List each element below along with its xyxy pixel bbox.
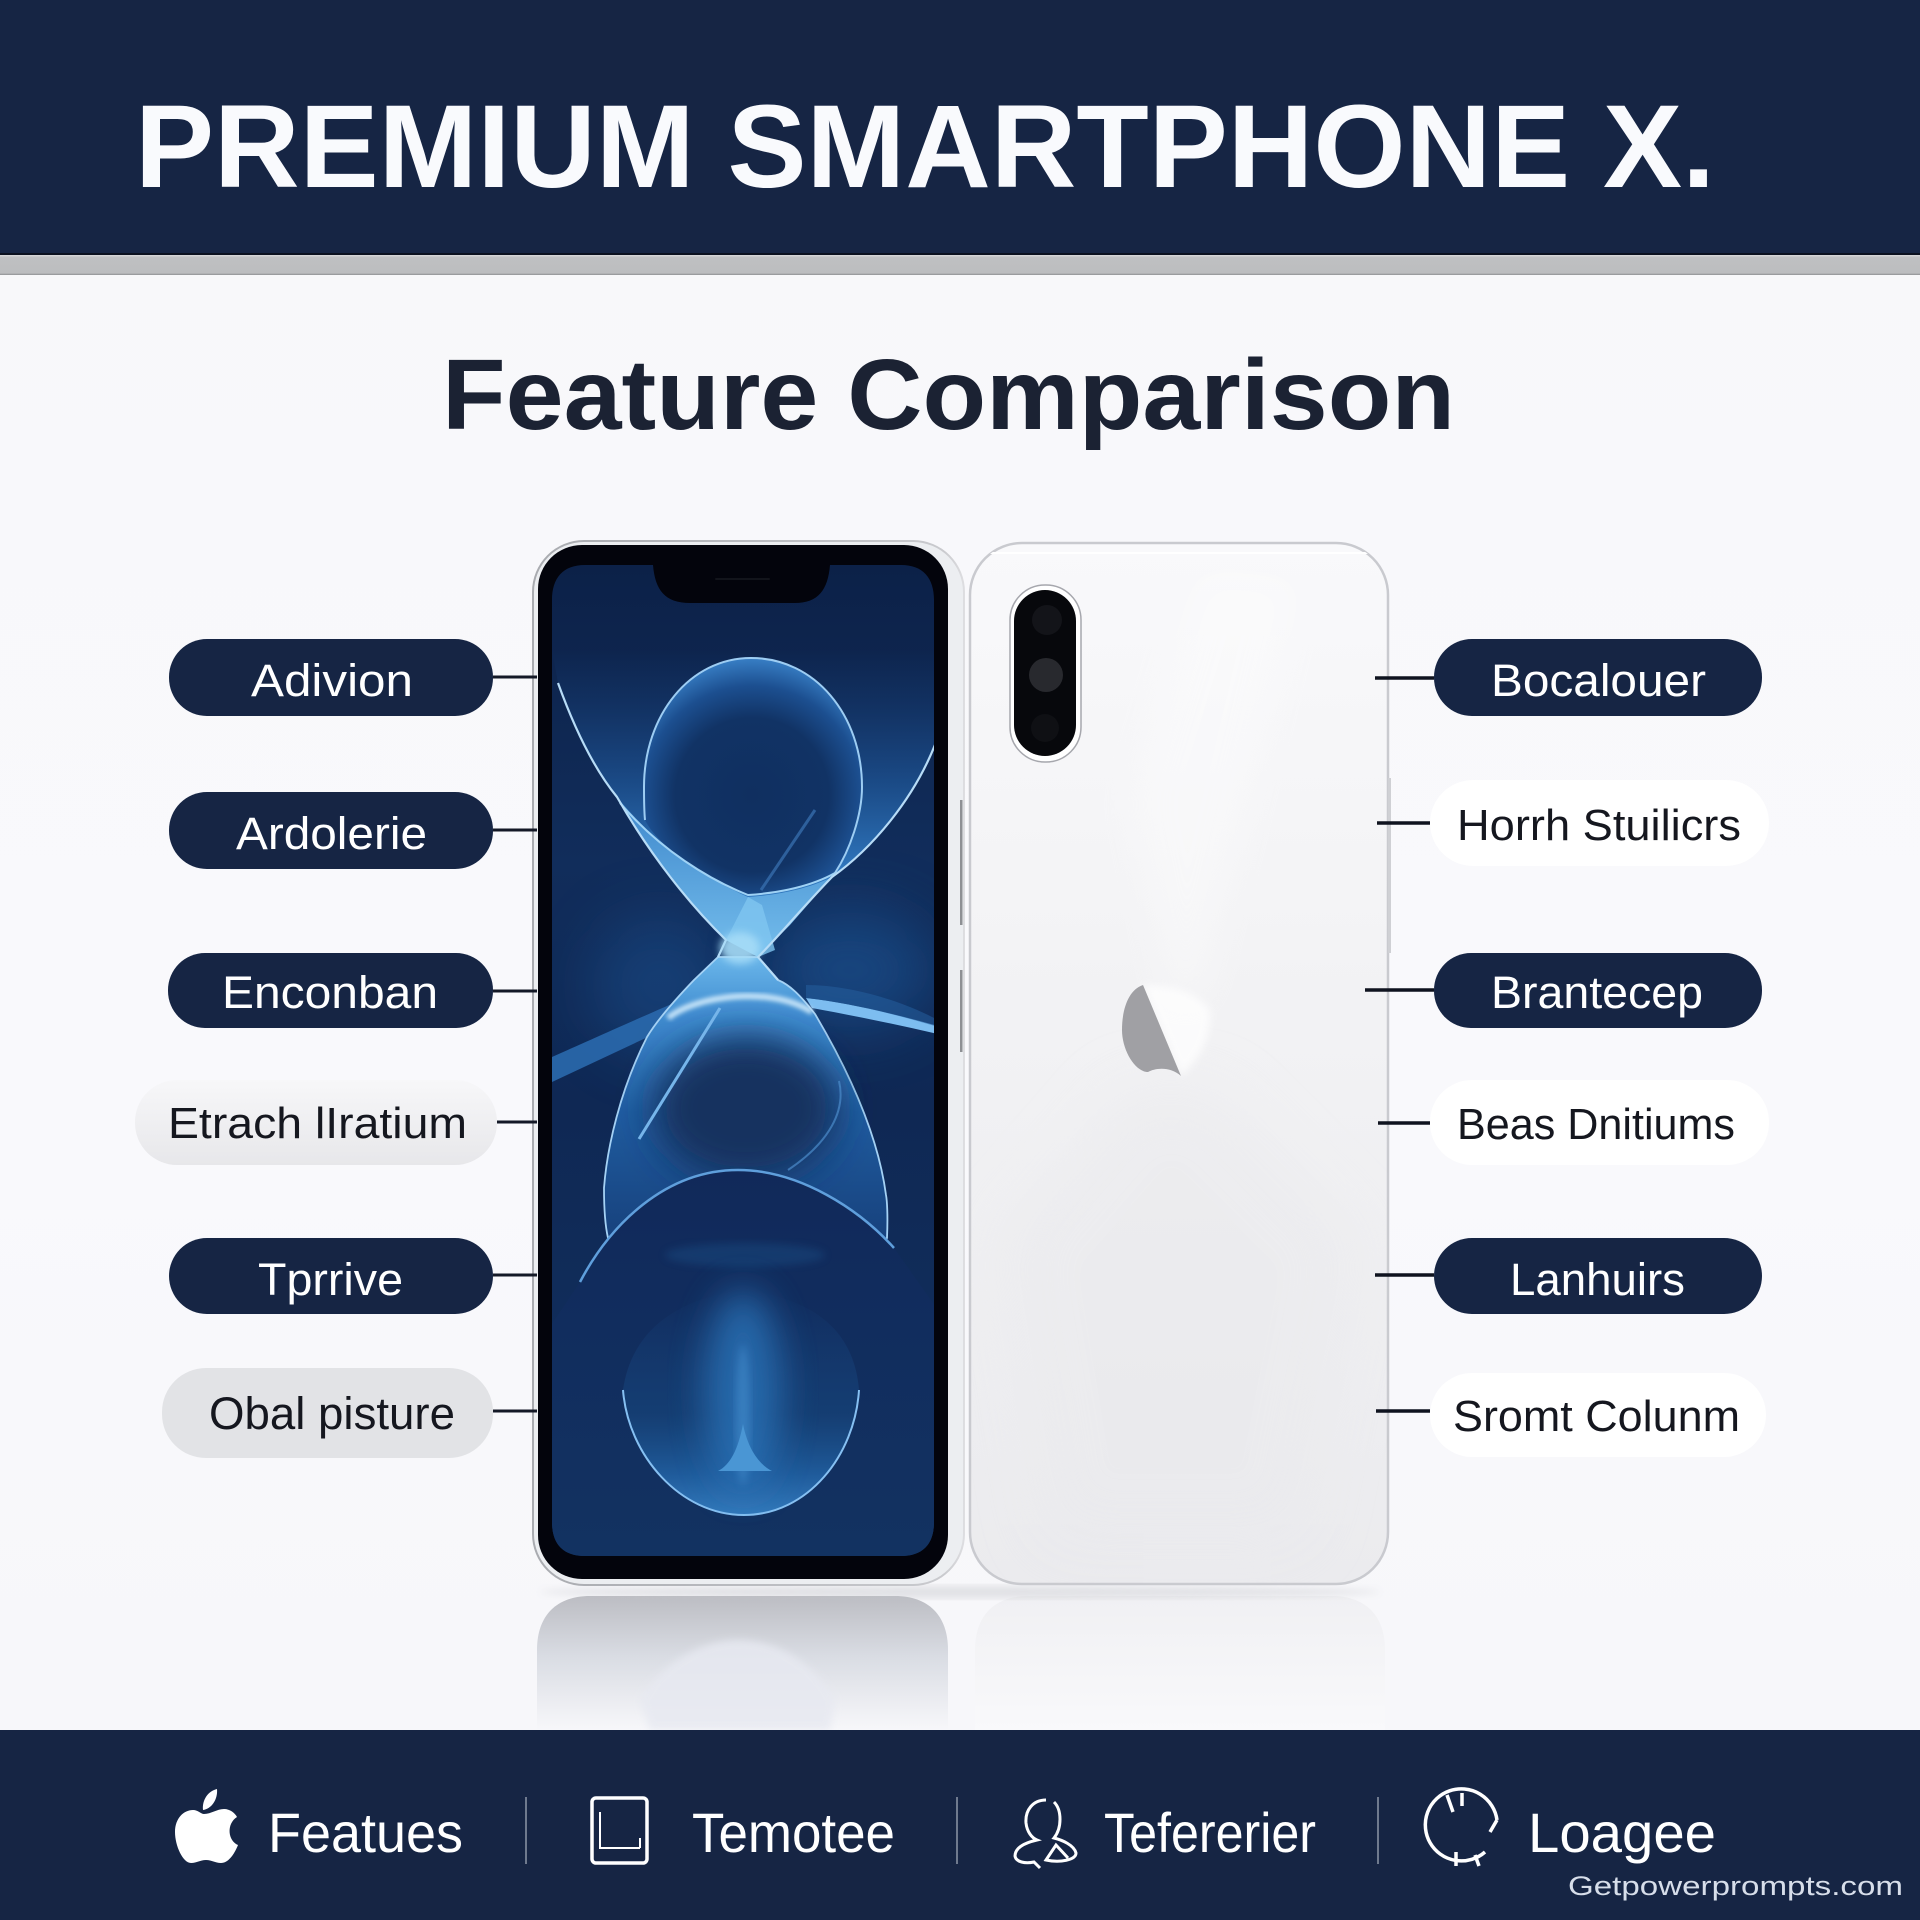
ribbon bands: [617, 797, 832, 957]
lens 1: [1032, 605, 1062, 635]
label: Lanhuirs: Lanhuirs: [1510, 1254, 1685, 1305]
lens 2: [1029, 658, 1063, 692]
bottom dome: [548, 1170, 938, 1560]
subtitle heading: Feature Comparison: [442, 339, 1455, 451]
Features label: Featues: [268, 1801, 463, 1864]
metal frame: [532, 540, 965, 1586]
camera module: [1010, 585, 1081, 762]
label: Enconban: Enconban: [222, 967, 438, 1018]
label: Horrh Stuilicrs: [1377, 780, 1769, 866]
label: Brantecep: Brantecep: [1491, 967, 1703, 1018]
swoosh edges: [558, 683, 726, 957]
central light beam: [705, 1290, 781, 1490]
label: Ardolerie: [169, 792, 537, 869]
soft light reflections: [975, 553, 1383, 1540]
arch band: [668, 996, 812, 1018]
title: PREMIUM SMARTPHONE X.: [135, 81, 1715, 213]
upper orb: [644, 658, 862, 895]
label: Tprrive: Tprrive: [258, 1254, 403, 1305]
phone: back: [970, 543, 1391, 1584]
label: Lanhuirs: [1375, 1238, 1762, 1314]
horizontal ribbon left: [552, 1004, 670, 1082]
divider: [956, 1797, 958, 1864]
label: Bocalouer: [1375, 639, 1762, 716]
label: Ardolerie: Ardolerie: [236, 808, 427, 859]
light arc on ribbons: [620, 803, 835, 895]
dome haze: [665, 1243, 825, 1267]
Loagee label: Loagee: [1528, 1801, 1716, 1864]
thin inner curve: [788, 1081, 841, 1170]
icon: tablet: [592, 1798, 647, 1863]
thin diagonal streak: [639, 1008, 720, 1139]
label: Enconban: [168, 953, 537, 1028]
label: Beas Dnitiums: Beas Dnitiums: [1457, 1100, 1735, 1149]
label: Brantecep: [1365, 953, 1762, 1028]
Temotee label: Temotee: [692, 1801, 895, 1864]
label: Sromt Colunm: [1376, 1373, 1766, 1457]
side button: [1388, 778, 1391, 953]
icon: person: [1015, 1800, 1076, 1868]
logo white half: [1143, 985, 1210, 1076]
small triangle: [718, 1424, 772, 1471]
black bezel: [538, 545, 948, 1579]
thin streak in orb: [761, 810, 815, 890]
label: Etrach lIratium: Etrach lIratium: [168, 1099, 467, 1148]
label: Sromt Colunm: Sromt Colunm: [1453, 1392, 1740, 1441]
icon: clock: [1425, 1789, 1497, 1866]
label: Adivion: Adivion: [251, 655, 413, 706]
Tefererier label: Tefererier: [1104, 1801, 1316, 1864]
divider: [1377, 1797, 1379, 1864]
phone reflections: [537, 1596, 1385, 1730]
label: Horrh Stuilicrs: Horrh Stuilicrs: [1457, 801, 1741, 850]
side wings: [558, 676, 934, 897]
label: Obal pisture: Obal pisture: [209, 1388, 455, 1439]
bottom oval: [623, 1332, 859, 1514]
header banner: [0, 0, 1920, 275]
lower orb: [603, 956, 888, 1240]
footer bar: [0, 1730, 1920, 1920]
haze behind ribbons: [590, 915, 730, 1055]
phone: front: [532, 540, 1380, 1598]
back body: [970, 543, 1388, 1584]
label: Bocalouer: Bocalouer: [1491, 655, 1706, 706]
label: Etrach lIratium: [135, 1080, 537, 1165]
icon: apple: [175, 1789, 238, 1863]
divider: [525, 1797, 527, 1864]
screen wallpaper: [548, 565, 938, 1560]
lens 3: [1031, 714, 1059, 742]
side buttons: [960, 800, 962, 925]
crossing glow: [720, 932, 760, 964]
label: Obal pisture: [162, 1368, 537, 1458]
logo grey half: [1122, 985, 1181, 1076]
label: Beas Dnitiums: [1378, 1080, 1769, 1165]
watermark: Getpowerprompts.com: [1568, 1871, 1903, 1901]
notch details: [715, 578, 770, 580]
ground shadow: [540, 1586, 1380, 1598]
label: Tprrive: [169, 1238, 537, 1314]
horizontal ribbon right: [806, 998, 938, 1034]
label: Adivion: [169, 639, 537, 716]
lower orb dark centre: [653, 1036, 839, 1180]
